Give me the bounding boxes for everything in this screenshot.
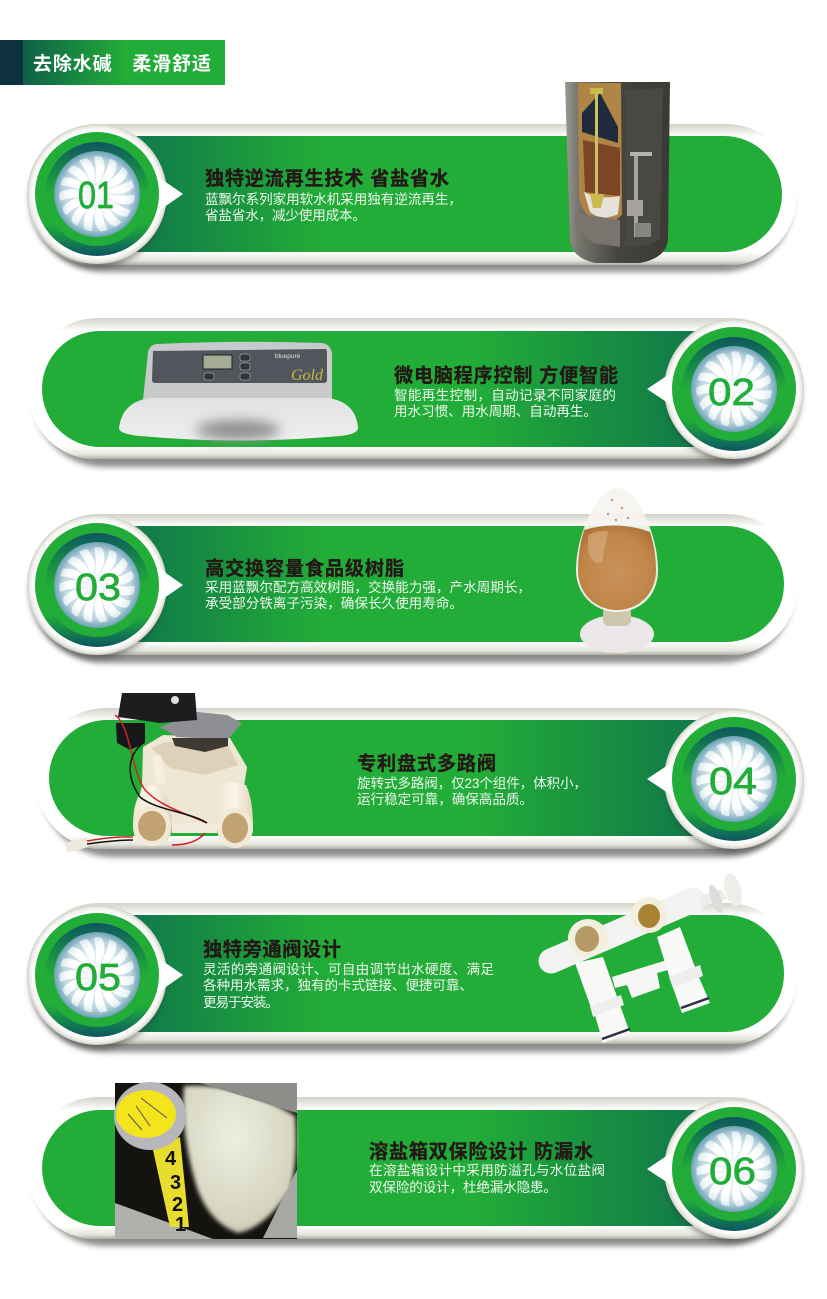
text block: 采用蓝飘尔配方高效树脂，交换能力强，产水周期长， xyxy=(205,579,531,595)
image: resin flask xyxy=(576,488,658,653)
pill background xyxy=(27,318,803,467)
panel: feature 01 xyxy=(27,82,797,272)
pill background xyxy=(27,1097,803,1246)
header title: 去除水碱 柔滑舒适 xyxy=(33,52,211,75)
number badge 05 xyxy=(27,905,183,1049)
number badge 03 xyxy=(27,515,183,659)
image: brine tank photo xyxy=(114,1082,297,1239)
heading: 微电脑程序控制 方便智能 xyxy=(394,364,618,387)
image: brine tank photo: 1 xyxy=(175,1214,186,1236)
text block: 蓝飘尔系列家用软水机采用独有逆流再生， xyxy=(205,191,462,207)
panel: feature 05 xyxy=(27,872,798,1052)
text block: 旋转式多路阀，仅23个组件，体积小， xyxy=(357,775,587,791)
pill background xyxy=(27,903,798,1052)
number badge 02: 02 xyxy=(708,372,755,414)
image: control head: Gold xyxy=(291,367,324,384)
pill background xyxy=(35,708,803,857)
text block: 省盐省水，减少使用成本。 xyxy=(205,207,366,223)
text block xyxy=(205,579,531,611)
text block: 更易于安装。 xyxy=(203,995,279,1010)
text block: 双保险的设计，杜绝漏水隐患。 xyxy=(369,1180,557,1195)
panel: feature 03 xyxy=(27,488,798,663)
text block: 灵活的旁通阀设计、可自由调节出水硬度、满足 xyxy=(203,961,494,977)
heading: 溶盐箱双保险设计 防漏水 xyxy=(369,1140,593,1163)
image: multi-way valve xyxy=(65,693,253,853)
text block: 各种用水需求，独有的卡式链接、便捷可靠、 xyxy=(203,977,473,993)
heading: 高交换容量食品级树脂 xyxy=(205,557,404,580)
text block: 在溶盐箱设计中采用防溢孔与水位盐阀 xyxy=(369,1163,605,1178)
number badge 01: 01 xyxy=(78,175,114,217)
number badge 02 xyxy=(647,319,804,463)
image: brine tank photo: 2 xyxy=(172,1194,183,1216)
text block xyxy=(205,191,462,223)
image: bypass valve xyxy=(551,872,745,1043)
image: control head xyxy=(119,342,358,440)
panel: feature 06 xyxy=(27,1082,804,1246)
number badge 03: 03 xyxy=(75,567,121,609)
number badge 05: 05 xyxy=(75,957,121,999)
image: brine tank photo: 4 xyxy=(165,1148,177,1170)
header banner xyxy=(0,40,225,85)
text block: 承受部分铁离子污染，确保长久使用寿命。 xyxy=(205,595,463,611)
text block: 用水习惯、用水周期、自动再生。 xyxy=(394,403,597,419)
number badge 01 xyxy=(27,124,183,268)
number badge 06: 06 xyxy=(709,1151,756,1193)
image: brine tank photo: 3 xyxy=(170,1172,181,1194)
number badge 04 xyxy=(647,709,804,853)
panel: feature 02 xyxy=(27,318,804,467)
text block xyxy=(357,775,587,807)
text block xyxy=(394,387,616,419)
image: softener tank cutaway xyxy=(565,82,670,263)
pill background xyxy=(27,514,798,663)
image: control head: bluepure xyxy=(275,353,301,360)
text block xyxy=(203,961,494,1010)
heading: 专利盘式多路阀 xyxy=(357,752,496,775)
text block: 运行稳定可靠，确保高品质。 xyxy=(357,791,533,807)
text block xyxy=(369,1163,605,1195)
pill background xyxy=(27,124,797,272)
heading: 独特旁通阀设计 xyxy=(203,938,341,961)
number badge 04: 04 xyxy=(709,761,757,803)
number badge 06 xyxy=(647,1099,804,1243)
heading: 独特逆流再生技术 省盐省水 xyxy=(205,167,449,190)
panel: feature 04 xyxy=(35,693,804,857)
text block: 智能再生控制，自动记录不同家庭的 xyxy=(394,387,616,403)
